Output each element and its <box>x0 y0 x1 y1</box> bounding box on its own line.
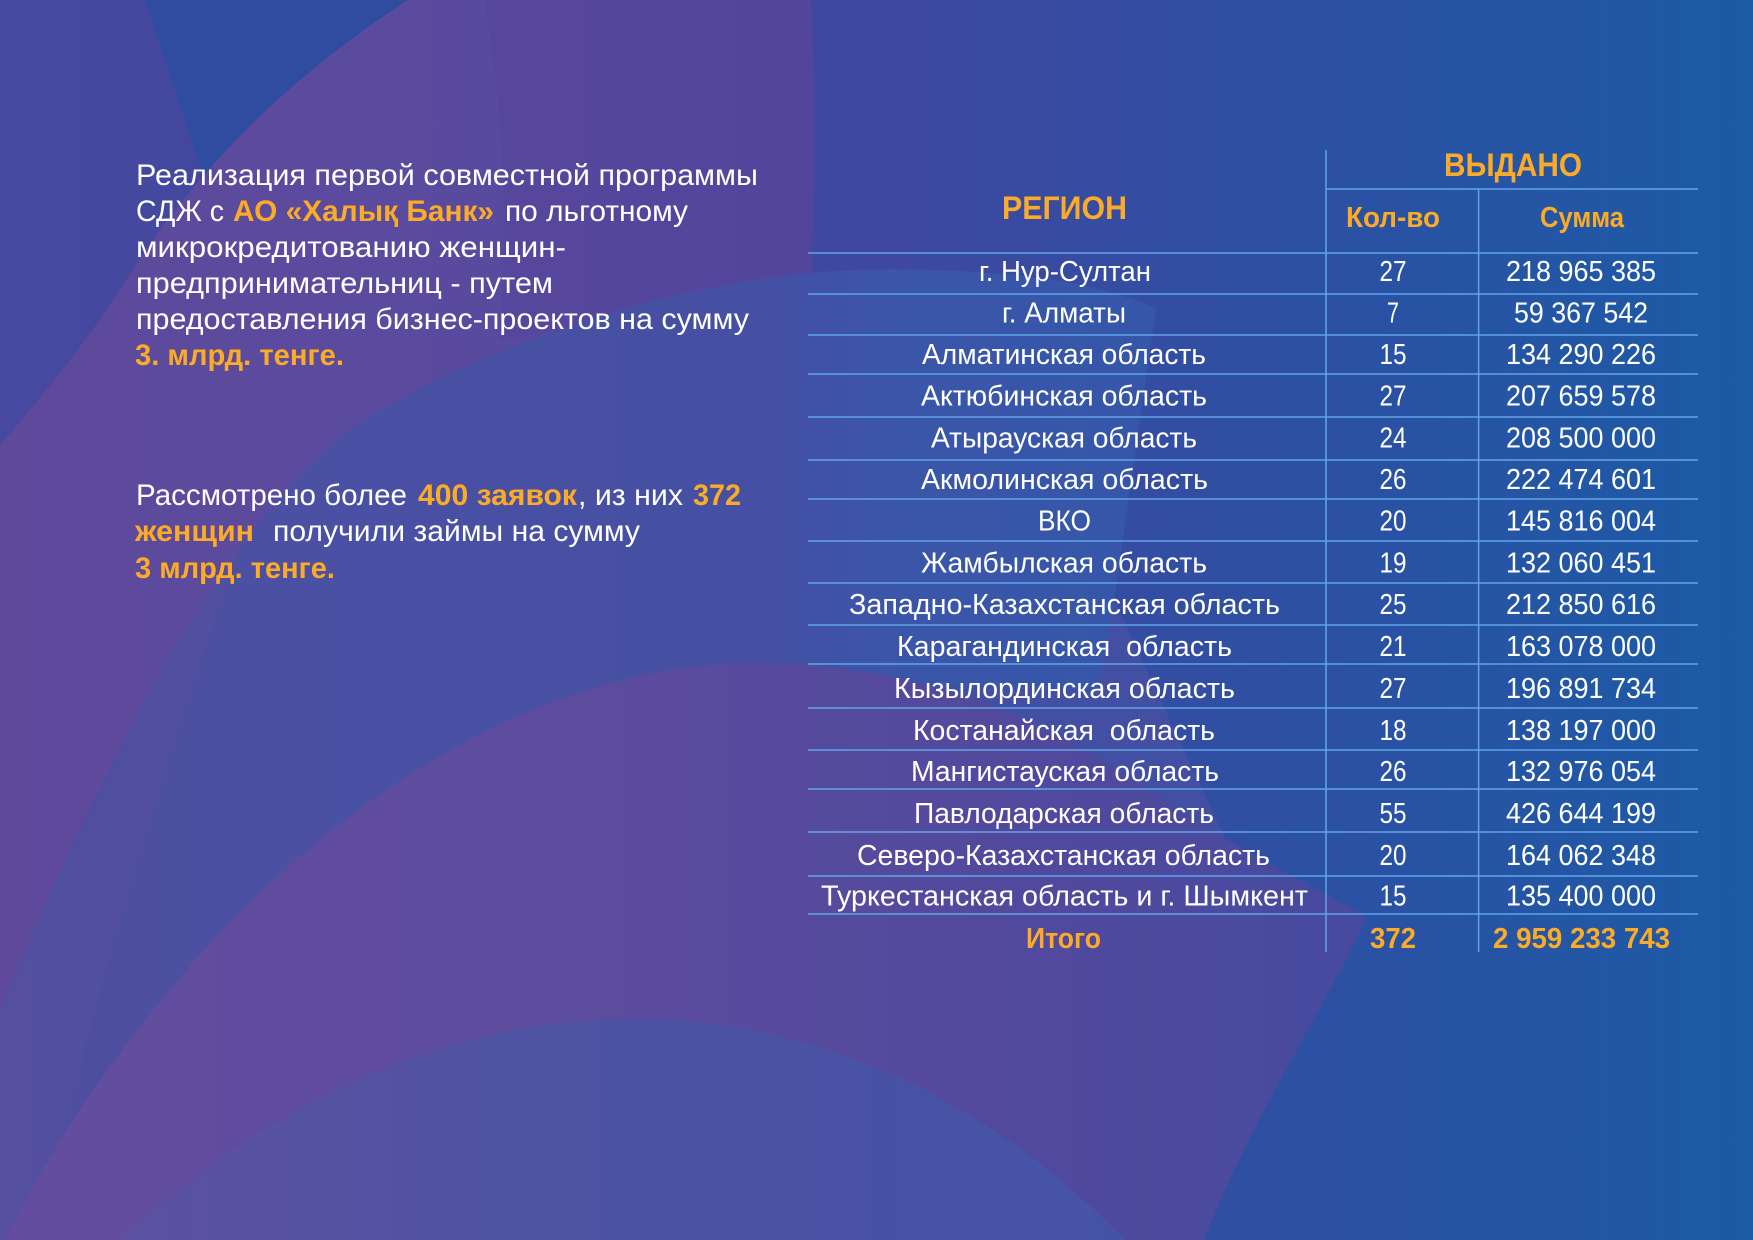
row: Жамбылская область: 132 060 451 <box>1506 548 1656 580</box>
table header: РЕГИОН <box>1002 190 1127 226</box>
row: Павлодарская область: 426 644 199 <box>1506 798 1656 830</box>
text block: applications result: Рассмотрено более <box>136 479 407 512</box>
row: Западно-Казахстанская область: Западно-Казахстанская область <box>849 589 1280 621</box>
text block: first program description <box>135 159 758 372</box>
row: Западно-Казахстанская область: 212 850 616 <box>1506 589 1656 621</box>
row: Западно-Казахстанская область <box>849 589 1656 621</box>
row: Туркестанская область и г. Шымкент: 15 <box>1380 880 1406 912</box>
row: Костанайская область: Костанайская область <box>913 715 1215 747</box>
row: г. Алматы: 7 <box>1387 298 1399 330</box>
row: Кызылординская область <box>894 673 1656 705</box>
table header <box>1002 147 1625 234</box>
row: Костанайская область: 18 <box>1380 715 1406 747</box>
text block: first program description: 3. млрд. тенге. <box>135 339 344 372</box>
text block: first program description: АО «Халық Банк» <box>233 195 494 228</box>
row: Актюбинская область: Актюбинская область <box>921 380 1207 412</box>
row: Актюбинская область <box>921 380 1656 412</box>
row: Павлодарская область: Павлодарская область <box>914 798 1214 830</box>
text block: first program description: предоставления бизнес-проектов на сумму <box>136 303 749 336</box>
row: Атырауская область: 24 <box>1380 422 1407 454</box>
row: total: 2 959 233 743 <box>1493 923 1670 955</box>
row: Карагандинская область: Карагандинская область <box>897 631 1232 663</box>
row: total <box>1026 923 1670 955</box>
table grid lines <box>808 150 1698 952</box>
row: г. Нур-Султан <box>979 256 1656 288</box>
row: г. Алматы <box>1002 298 1648 330</box>
row: ВКО: 20 <box>1380 506 1406 538</box>
row: total: Итого <box>1026 923 1101 955</box>
row: Акмолинская область: 222 474 601 <box>1506 464 1656 496</box>
row: Акмолинская область: 26 <box>1380 464 1406 496</box>
row: Северо-Казахстанская область: 20 <box>1380 840 1406 872</box>
text block: applications result: 372 <box>693 479 741 512</box>
row: ВКО: 145 816 004 <box>1506 506 1656 538</box>
row: Северо-Казахстанская область: Северо-Казахстанская область <box>857 840 1270 872</box>
row: Кызылординская область: 27 <box>1380 673 1406 705</box>
text block: applications result: , из них <box>578 479 683 512</box>
row: ВКО: ВКО <box>1038 506 1091 538</box>
row: Кызылординская область: 196 891 734 <box>1506 673 1656 705</box>
row: Алматинская область: 134 290 226 <box>1506 339 1656 371</box>
table header: Сумма <box>1540 202 1625 234</box>
row: Актюбинская область: 207 659 578 <box>1506 380 1656 412</box>
row: Западно-Казахстанская область: 25 <box>1380 589 1406 621</box>
row: Акмолинская область: Акмолинская область <box>921 464 1208 496</box>
row: Северо-Казахстанская область <box>857 840 1656 872</box>
row: Туркестанская область и г. Шымкент: 135 400 000 <box>1506 880 1656 912</box>
row: Карагандинская область <box>897 631 1656 663</box>
text block: applications result: 400 заявок <box>418 479 577 512</box>
row: Актюбинская область: 27 <box>1380 380 1406 412</box>
row: Туркестанская область и г. Шымкент: Туркестанская область и г. Шымкент <box>821 880 1308 912</box>
row: Алматинская область: 15 <box>1380 339 1406 371</box>
text block: first program description: по льготному <box>505 195 688 228</box>
row: г. Нур-Султан: 218 965 385 <box>1506 256 1656 288</box>
row: Костанайская область: 138 197 000 <box>1506 715 1656 747</box>
row: Алматинская область <box>922 339 1656 371</box>
table header: Кол-во <box>1346 202 1440 234</box>
row: Жамбылская область <box>921 548 1656 580</box>
table: loans by region <box>808 147 1698 955</box>
row: г. Алматы: г. Алматы <box>1002 298 1126 330</box>
text block: first program description: СДЖ с <box>136 195 224 228</box>
text block: first program description: микрокредитованию женщин- <box>136 231 566 264</box>
row: Атырауская область: 208 500 000 <box>1506 422 1656 454</box>
table header: ВЫДАНО <box>1444 147 1582 183</box>
row: Акмолинская область <box>921 464 1656 496</box>
row: Кызылординская область: Кызылординская область <box>894 673 1235 705</box>
text block: first program description: Реализация первой совместной программы <box>136 159 758 192</box>
row: Туркестанская область и г. Шымкент <box>821 880 1656 912</box>
row: г. Нур-Султан: 27 <box>1380 256 1406 288</box>
row: Жамбылская область: 19 <box>1380 548 1406 580</box>
row: Карагандинская область: 163 078 000 <box>1506 631 1656 663</box>
row: Мангистауская область <box>911 756 1656 788</box>
text block: applications result: 3 млрд. тенге. <box>135 552 335 585</box>
row: ВКО <box>1038 506 1656 538</box>
row: Павлодарская область: 55 <box>1380 798 1406 830</box>
row: г. Алматы: 59 367 542 <box>1514 298 1648 330</box>
row: Мангистауская область: 132 976 054 <box>1506 756 1656 788</box>
text block: applications result: получили займы на сумму <box>273 515 640 548</box>
row: Алматинская область: Алматинская область <box>922 339 1206 371</box>
row: г. Нур-Султан: г. Нур-Султан <box>979 256 1151 288</box>
row: total: 372 <box>1370 923 1416 955</box>
row: Костанайская область <box>913 715 1656 747</box>
row: Атырауская область: Атырауская область <box>931 422 1197 454</box>
row: Мангистауская область: Мангистауская область <box>911 756 1219 788</box>
row: Мангистауская область: 26 <box>1380 756 1406 788</box>
row: Северо-Казахстанская область: 164 062 348 <box>1506 840 1656 872</box>
row: Атырауская область <box>931 422 1656 454</box>
row: Павлодарская область <box>914 798 1656 830</box>
text block: first program description: предпринимательниц - путем <box>136 267 553 300</box>
row: Карагандинская область: 21 <box>1380 631 1406 663</box>
text block: applications result: женщин <box>134 515 254 548</box>
text block: applications result <box>134 479 741 585</box>
row: Жамбылская область: Жамбылская область <box>921 548 1207 580</box>
